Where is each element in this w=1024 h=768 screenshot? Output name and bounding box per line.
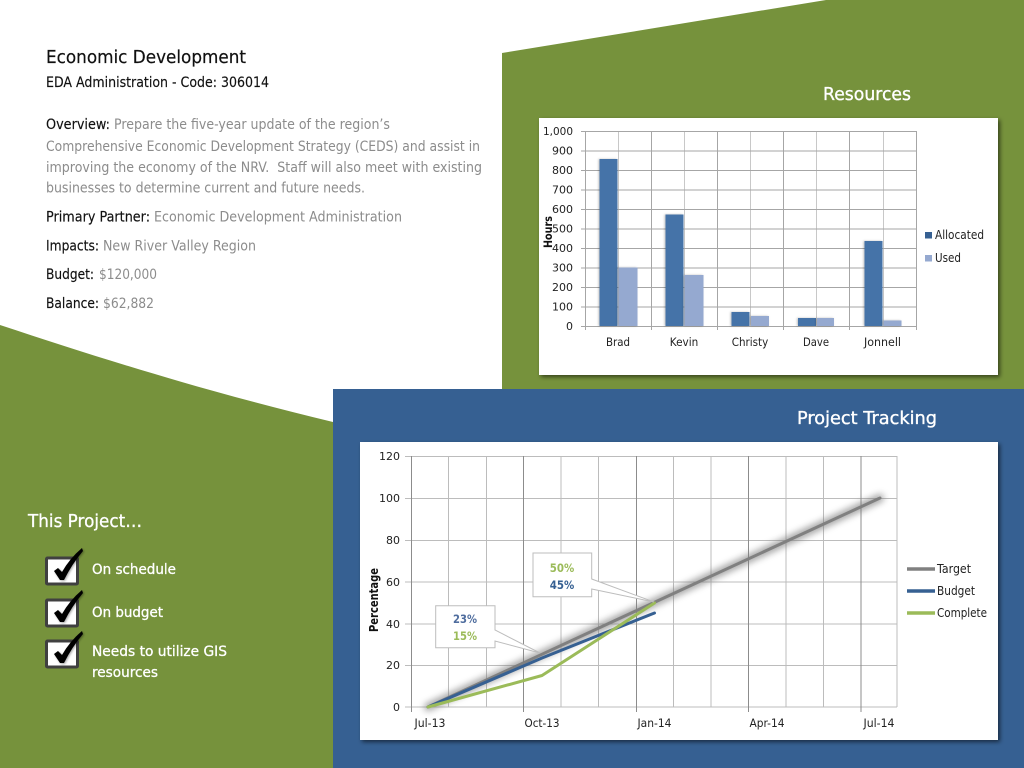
overview: Prepare the five-year update of the region’s xyxy=(114,117,390,133)
y axis labels xyxy=(543,125,573,333)
heading: this project: This Project… xyxy=(27,512,142,532)
label: needs to utilize gis resources: Needs to utilize GIS xyxy=(92,644,227,660)
callout: 23% / 15% xyxy=(436,606,540,653)
callout: 50% / 45%: 50% xyxy=(550,561,575,575)
y axis labels: 20 xyxy=(386,659,400,672)
y axis labels: 1,000 xyxy=(543,125,573,138)
y axis labels: 0 xyxy=(566,320,573,333)
y axis labels: 700 xyxy=(552,184,573,196)
y axis title: Hours xyxy=(541,216,555,248)
x axis labels xyxy=(414,716,894,730)
y axis labels: 120 xyxy=(379,450,400,463)
category labels: Dave xyxy=(803,335,829,349)
y axis labels xyxy=(379,450,400,714)
label: needs to utilize gis resources xyxy=(92,644,227,681)
line: budget xyxy=(428,613,654,707)
impacts xyxy=(46,238,256,254)
y axis labels: 400 xyxy=(552,242,573,255)
primary partner: Economic Development Administration xyxy=(154,210,402,226)
y axis labels: 60 xyxy=(386,576,400,589)
y axis title: Percentage xyxy=(367,568,381,632)
icon: checkbox on budget xyxy=(46,590,83,626)
category labels xyxy=(606,335,901,349)
bars: allocated xyxy=(600,159,882,326)
heading: resources: Resources xyxy=(823,84,911,105)
callout: 23% / 15%: 15% xyxy=(453,629,477,643)
budget: $120,000 xyxy=(99,267,157,283)
icon: checkbox gis xyxy=(46,631,83,667)
balance: Balance: xyxy=(46,296,99,312)
impacts: Impacts: xyxy=(46,238,99,254)
y axis labels: 80 xyxy=(386,534,400,547)
y axis labels: 100 xyxy=(552,300,573,314)
icon: checkbox on schedule xyxy=(46,548,83,584)
balance xyxy=(46,296,154,312)
y axis labels: 500 xyxy=(552,222,573,236)
callout: 23% / 15%: 23% xyxy=(453,612,477,626)
overview: businesses to determine current and future needs. xyxy=(46,180,365,196)
category labels: Jonnell xyxy=(863,335,901,349)
x axis labels: Jul-13 xyxy=(414,716,446,730)
legend: Complete xyxy=(937,606,987,620)
y axis labels: 800 xyxy=(552,164,573,177)
label: on schedule: On schedule xyxy=(92,562,176,578)
budget: Budget: xyxy=(46,267,94,283)
balance: $62,882 xyxy=(103,296,154,312)
legend: Target xyxy=(936,562,971,576)
category labels: Kevin xyxy=(670,335,698,349)
panel: green bottom-left background xyxy=(0,325,333,768)
y axis labels: 900 xyxy=(552,144,573,158)
panel: green top-right background xyxy=(502,0,1024,392)
callout: 50% / 45% xyxy=(533,553,654,602)
panel: resources bar chart xyxy=(539,118,998,375)
panel: blue project tracking background xyxy=(333,389,1024,768)
primary partner: Primary Partner: xyxy=(46,210,150,226)
label: needs to utilize gis resources: resources xyxy=(92,665,158,681)
subtitle: EDA Administration - Code: 306014 xyxy=(46,75,269,91)
x axis labels: Oct-13 xyxy=(524,716,560,730)
x axis labels: Apr-14 xyxy=(750,716,784,730)
category labels: Brad xyxy=(606,335,630,349)
title: Economic Development xyxy=(46,47,246,68)
x axis labels: Jul-14 xyxy=(863,716,894,730)
y axis labels: 100 xyxy=(379,492,400,505)
y axis labels: 0 xyxy=(393,701,400,714)
overview: Overview: xyxy=(46,117,110,133)
line: target xyxy=(428,498,880,707)
heading: project tracking: Project Tracking xyxy=(797,408,937,429)
overview: Comprehensive Economic Development Strategy (CEDS) and assist in xyxy=(46,139,480,155)
budget xyxy=(46,267,157,283)
impacts: New River Valley Region xyxy=(103,238,256,254)
y axis labels: 200 xyxy=(552,281,573,294)
y axis labels: 600 xyxy=(552,203,573,216)
bars: used xyxy=(618,268,902,326)
panel: project tracking line chart xyxy=(360,442,998,740)
legend xyxy=(925,228,984,265)
text block: project details xyxy=(46,47,482,312)
legend: Used xyxy=(935,251,961,265)
line: complete xyxy=(428,603,654,707)
panel: this project checklist xyxy=(27,512,227,681)
primary partner xyxy=(46,210,402,226)
category labels: Christy xyxy=(732,335,768,349)
legend xyxy=(907,562,987,620)
label: on budget: On budget xyxy=(92,605,163,621)
x axis labels: Jan-14 xyxy=(637,716,672,730)
legend: Budget xyxy=(937,584,975,598)
overview xyxy=(46,117,482,196)
y axis labels: 300 xyxy=(552,262,573,274)
callout: 50% / 45%: 45% xyxy=(550,578,575,592)
overview: improving the economy of the NRV. Staff will also meet with existing xyxy=(46,160,482,176)
y axis labels: 40 xyxy=(386,618,400,631)
legend: Allocated xyxy=(935,228,984,242)
